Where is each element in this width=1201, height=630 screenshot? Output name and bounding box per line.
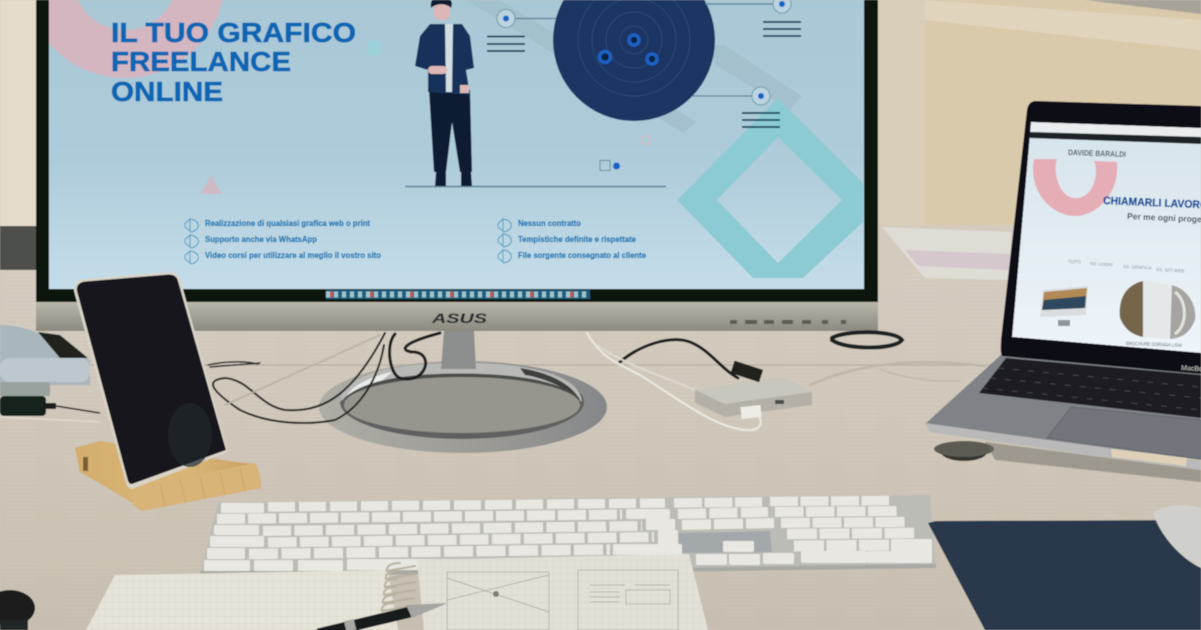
callout lower right [693,87,780,127]
mouse pad [928,520,1201,630]
pink triangle [200,176,222,194]
laptop screen [1012,122,1201,353]
headline [111,22,356,102]
laptop tabs: SS. SITI WEB [1156,267,1184,273]
callout top left [487,10,556,51]
keyboard keys [204,503,932,571]
lens cap [0,590,35,630]
phone on bamboo stand [74,272,261,511]
monitor bezel [36,0,878,303]
headline: IL TUO GRAFICO [111,17,356,48]
bullet list left [205,219,381,260]
monitor chin with logo: ASUS [431,310,488,326]
pink ring decoration [49,0,201,54]
wireless keyboard [200,495,936,575]
right page with sketches [417,554,708,630]
notebook rings [382,563,415,611]
base ring [319,361,607,453]
laptop thumbnail imac [1040,286,1088,326]
stand neck [441,331,476,369]
target circle [553,0,715,121]
teal diamond [677,98,863,278]
laptop front edge [925,423,1201,470]
bullet list right: Tempistiche definite e rispettate [518,235,637,244]
monitor chin with logo [36,302,878,331]
bamboo stand [75,441,261,511]
laptop tabs [1068,259,1184,273]
headphones [0,325,90,396]
laptop tabs: SS. GRAFICA [1123,264,1152,270]
ground line [405,186,666,188]
left page [86,570,398,630]
small shapes [600,136,650,170]
laptop trackpad [1047,407,1201,459]
bullet list left: Video corsi per utilizzare al meglio il vostro sito [205,251,381,260]
usb hub [695,361,812,419]
stand under laptop [934,441,1201,482]
phone body [74,272,228,489]
laptop [925,101,1201,482]
cable plug left [0,396,100,422]
papers on desk [882,227,1012,280]
bullet list right: Nessun contratto [518,219,581,228]
monitor stand [319,331,607,453]
callout top right [705,0,801,36]
teal square [367,41,381,55]
background wall [0,0,1201,280]
monitor [36,0,878,331]
laptop site logo: DAVIDE BARALDI [1068,148,1126,159]
laptop pink ring [1033,159,1117,216]
laptop tabs: SS. LOGHI [1090,261,1113,267]
bullet list left: Realizzazione di qualsiasi grafica web o print [205,219,370,228]
laptop lid [1001,101,1201,374]
pale diagonal band [466,0,802,133]
headline: FREELANCE [111,46,291,77]
standing man figure [415,0,474,186]
laptop deck [925,354,1201,460]
screen slide [49,0,864,289]
laptop tabs: TUTTI [1068,259,1081,265]
cables [208,332,985,430]
desk surface [0,225,1201,630]
bullet list right [518,219,647,260]
dock icons [326,290,590,299]
bullet list right: File sorgente consegnato al cliente [518,251,647,260]
pen [318,603,448,630]
headline: ONLINE [111,76,223,107]
mouse [1153,505,1201,568]
laptop notch tab [1111,449,1187,466]
keyboard base [200,495,936,575]
laptop caption: BROCHURE DORIANA LISAI [1126,341,1182,349]
laptop thumbnail brochure [1120,281,1195,339]
spiral notebook [86,554,708,630]
phone screen [77,274,226,484]
laptop keyboard [979,358,1201,418]
bullet icons [185,219,511,264]
bullet list left: Supporto anche via WhatsApp [205,235,317,244]
